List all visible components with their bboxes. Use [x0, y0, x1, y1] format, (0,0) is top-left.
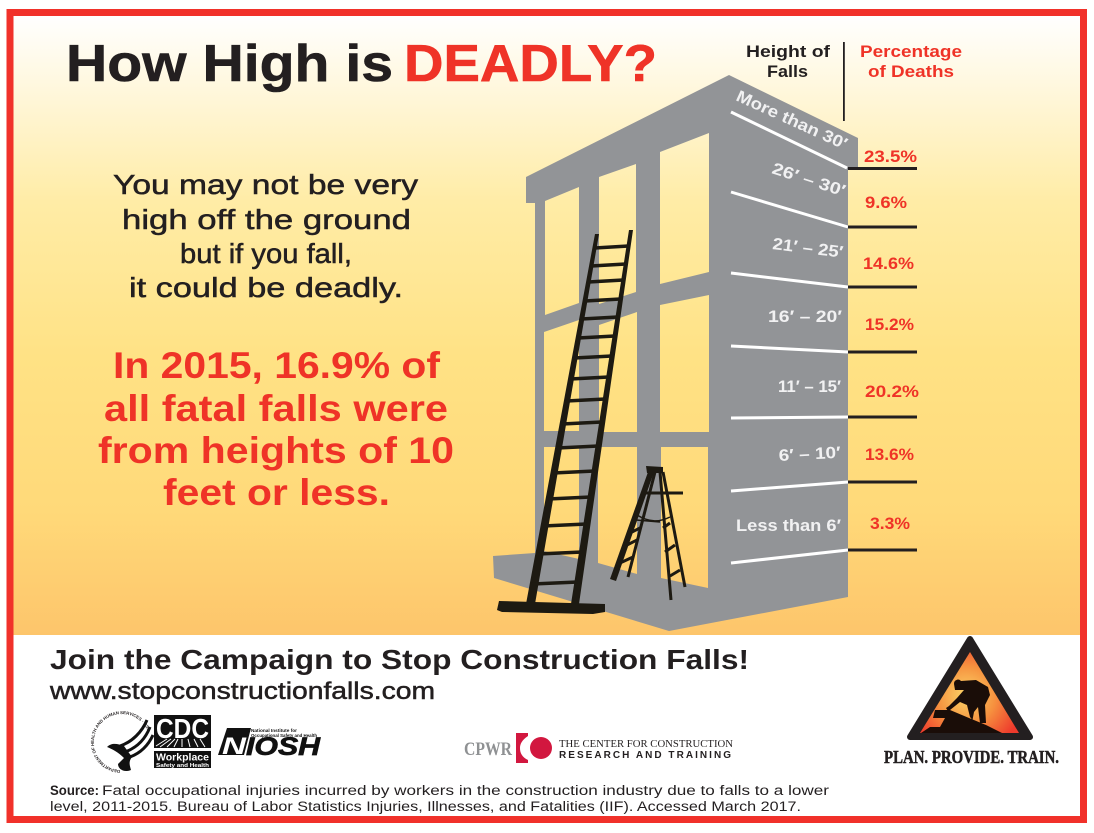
intro text: You may not be very	[113, 169, 418, 200]
height labels	[733, 87, 850, 535]
building illustration	[493, 75, 858, 631]
percentage values: 3.3%	[870, 515, 910, 533]
percentage values: 15.2%	[865, 316, 914, 334]
percentage values: 14.6%	[863, 255, 914, 273]
logo: CDC workplace safety and health: Safety and Health	[156, 763, 210, 769]
percentage rules	[848, 167, 917, 552]
intro text: high off the ground	[122, 204, 411, 235]
percentage values: 23.5%	[864, 148, 917, 166]
source note: Fatal occupational injuries incurred by workers in the construction industry due to falls to a lower	[102, 783, 830, 798]
icon: step ladder	[610, 466, 685, 600]
icon: extension ladder	[497, 230, 633, 614]
logo: CPWR: THE CENTER FOR CONSTRUCTION	[559, 739, 733, 750]
key statistic callout: In 2015, 16.9% of	[113, 345, 441, 386]
logo: HHS eagle: DEPARTMENT OF HEALTH AND HUMAN SERVICES · USA	[90, 711, 149, 773]
percentage values	[863, 148, 919, 533]
logo: CDC workplace safety and health: Workplace	[156, 752, 209, 764]
key statistic callout: from heights of 10	[98, 430, 454, 471]
percentage values: 9.6%	[865, 194, 907, 212]
logo: CPWR: RESEARCH AND TRAINING	[559, 750, 731, 761]
logo: plan provide train triangle	[910, 639, 1030, 737]
column header: percentage of deaths: of Deaths	[868, 62, 954, 81]
logo: CDC workplace safety and health: CDC	[156, 713, 209, 744]
title: DEADLY?	[404, 35, 657, 93]
logo: CPWR: CPWR	[464, 739, 512, 760]
logo: NIOSH: National Institute for	[251, 728, 297, 733]
footer campaign heading: Join the Campaign to Stop Construction Falls!	[50, 644, 749, 675]
height labels: More than 30′	[733, 87, 850, 153]
campaign url: www.stopconstructionfalls.com	[49, 678, 435, 705]
percentage values: 13.6%	[865, 446, 914, 464]
title	[66, 35, 657, 93]
logo: NIOSH: N	[222, 733, 247, 760]
height labels: 21′ – 25′	[772, 235, 844, 262]
logo: CDC workplace safety and health	[154, 713, 211, 769]
height labels: 26′ – 30′	[770, 160, 848, 200]
key statistic callout	[98, 345, 454, 513]
column header: height of falls: Height of	[746, 42, 830, 61]
intro text: but if you fall,	[180, 238, 352, 269]
height band dividers	[731, 112, 848, 563]
height labels: 16′ – 20′	[768, 308, 842, 326]
key statistic callout: feet or less.	[163, 472, 390, 513]
column header: height of falls: Falls	[767, 62, 808, 81]
source note: Source:	[50, 783, 99, 798]
height labels: 6′ – 10′	[778, 444, 841, 465]
column header: percentage of deaths	[860, 42, 962, 81]
logo: NIOSH: IOSH	[246, 733, 321, 761]
source note: level, 2011-2015. Bureau of Labor Statistics Injuries, Illnesses, and Fatalities (IIF). Accessed March 2017.	[50, 799, 801, 814]
logo: NIOSH	[218, 728, 321, 761]
intro text: it could be deadly.	[129, 272, 403, 303]
height labels: Less than 6′	[736, 517, 841, 535]
header divider	[843, 42, 845, 121]
column header: height of falls	[746, 42, 830, 81]
column header: percentage of deaths: Percentage	[860, 42, 962, 61]
background panel	[13, 16, 1080, 635]
logo: NIOSH: Occupational Safety and Health	[251, 733, 317, 738]
key statistic callout: all fatal falls were	[104, 388, 448, 429]
source note	[50, 783, 830, 814]
percentage values: 20.2%	[865, 383, 919, 401]
title: How High is	[66, 35, 393, 93]
tagline: PLAN. PROVIDE. TRAIN.	[884, 747, 1059, 767]
logo: CPWR	[464, 733, 733, 763]
height labels: 11′ – 15′	[778, 378, 841, 396]
worker and roof silhouette	[921, 680, 1002, 733]
intro text	[113, 169, 418, 303]
